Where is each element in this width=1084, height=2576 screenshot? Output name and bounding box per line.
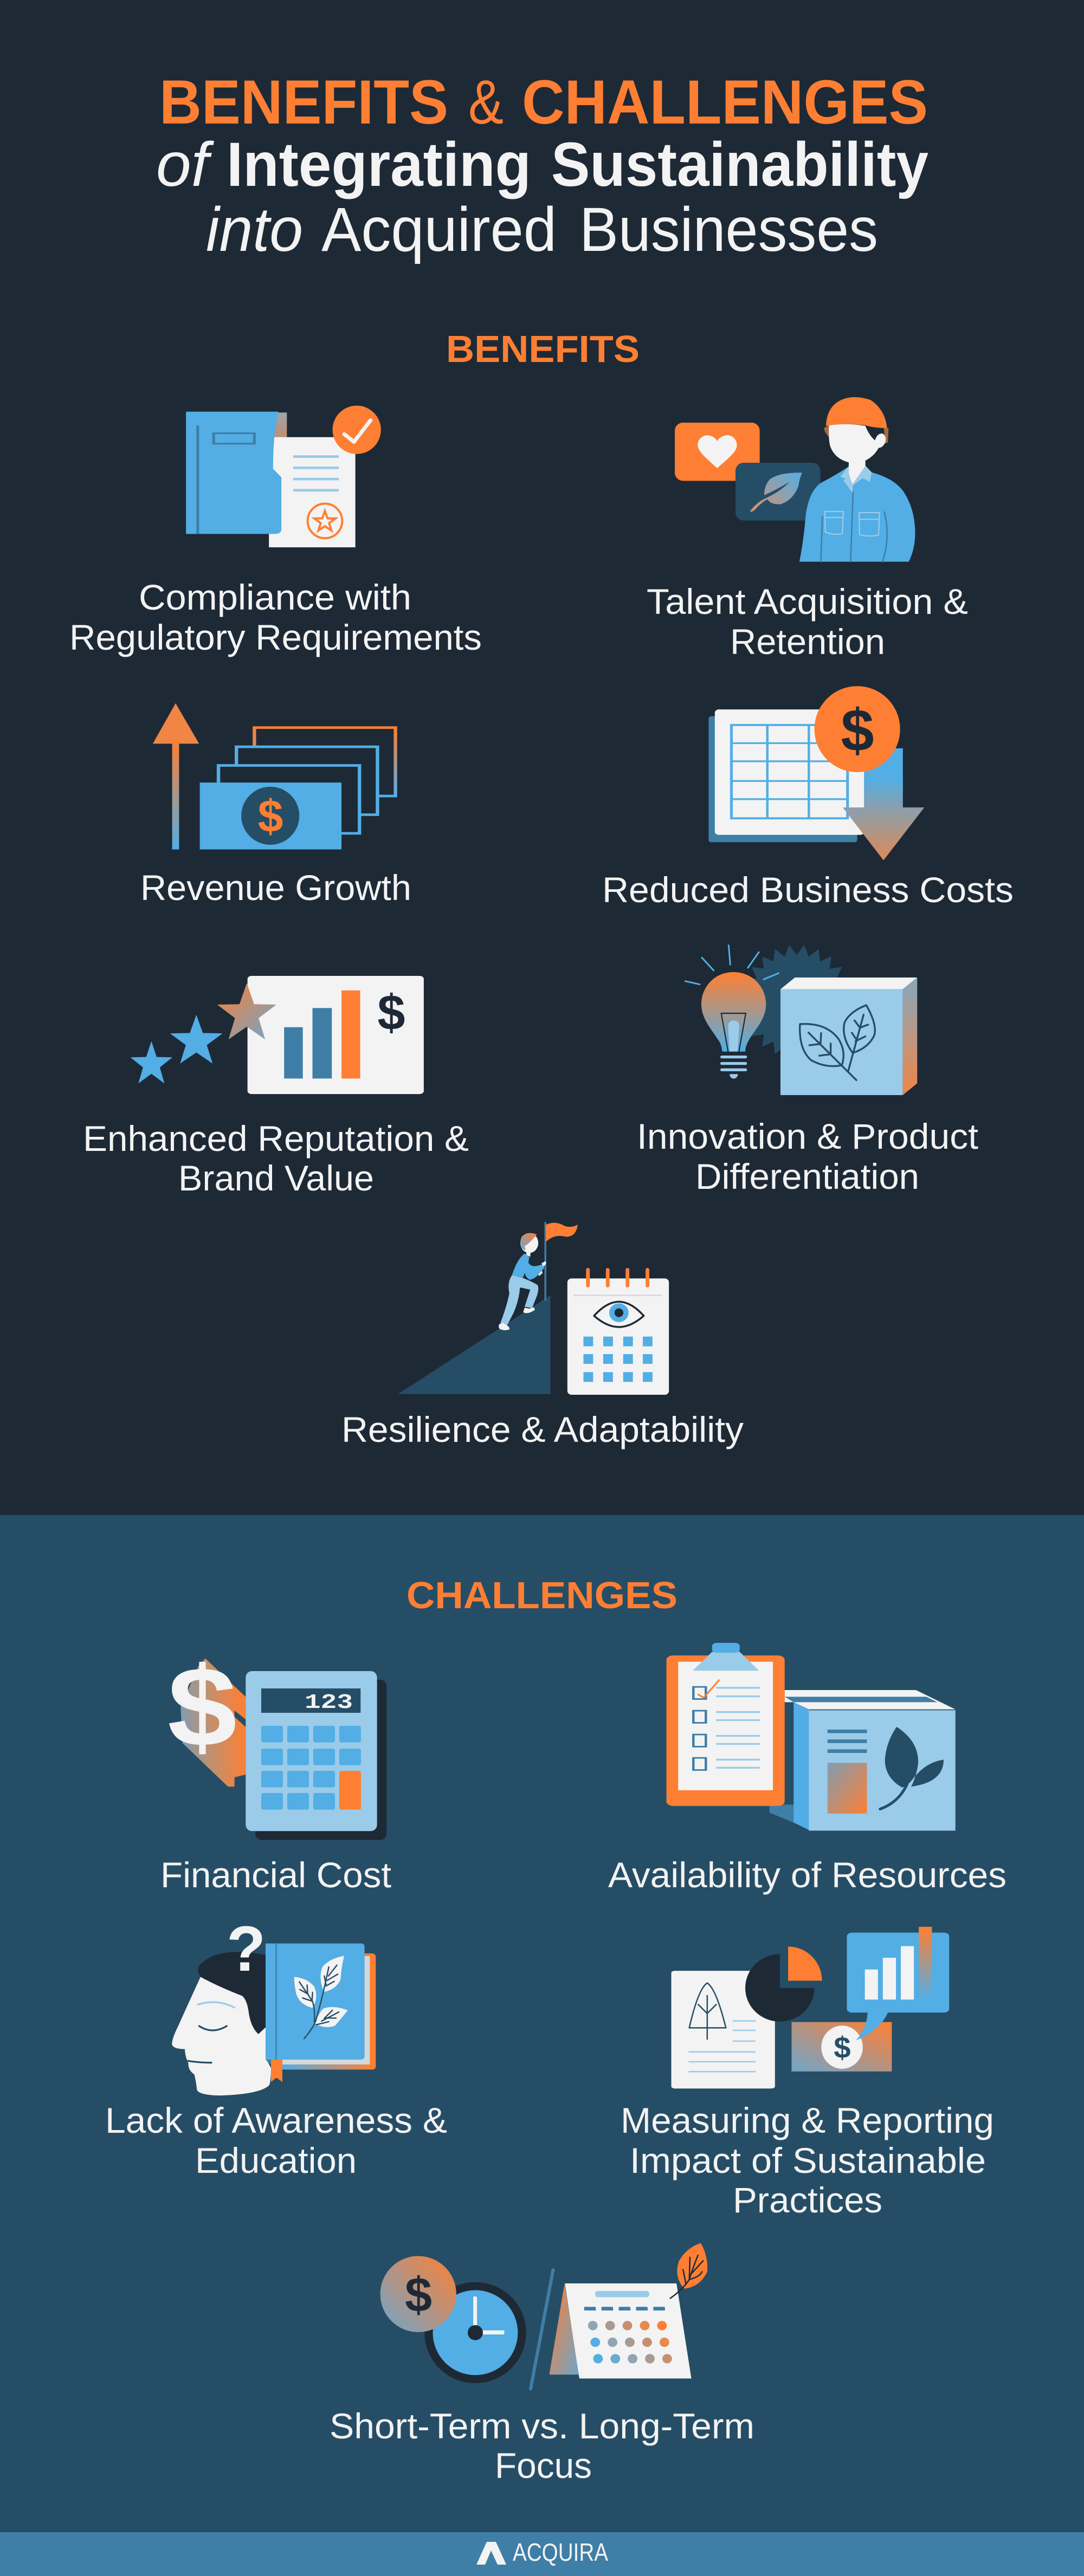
panel: benefits background and content	[0, 0, 1084, 1515]
title: Businesses	[579, 195, 878, 264]
label: reputation: Enhanced Reputation &	[83, 1118, 469, 1158]
logo mark	[476, 2542, 506, 2565]
title: Acquired	[321, 195, 557, 264]
label: compliance: Compliance with	[139, 577, 411, 617]
label: innovation: Innovation & Product	[637, 1116, 978, 1156]
icon: money stack with up arrow: $	[258, 791, 283, 842]
icon: clock versus calendar	[380, 2243, 707, 2389]
label: reputation: Brand Value	[178, 1158, 374, 1198]
icon: clock versus calendar: $	[405, 2268, 432, 2322]
icon: chart with rating stars: $	[377, 985, 405, 1040]
title	[156, 68, 928, 264]
label: measuring: Measuring & Reporting	[621, 2100, 994, 2140]
label: resilience: Resilience & Adaptability	[341, 1409, 744, 1449]
label: short vs long term: Short-Term vs. Long-Term	[330, 2406, 754, 2446]
icon: climber with flag and calendar	[398, 1222, 669, 1395]
label: short vs long term	[330, 2406, 754, 2486]
title: BENEFITS	[159, 68, 448, 137]
label: revenue growth: Revenue Growth	[140, 868, 411, 908]
title: into	[206, 195, 303, 264]
label: financial cost: Financial Cost	[160, 1855, 391, 1895]
label: compliance	[69, 577, 482, 657]
heading: benefits: BENEFITS	[446, 328, 640, 370]
label: talent: Retention	[730, 622, 885, 662]
icon: head with question mark and book: ?	[227, 1913, 266, 1985]
footer bar	[0, 2532, 1084, 2576]
icon: head with question mark and book	[172, 1913, 376, 2095]
label: lack of awareness: Lack of Awareness &	[105, 2100, 447, 2140]
icon: worker with heart and leaf cards	[675, 397, 915, 562]
label: measuring: Impact of Sustainable	[630, 2140, 986, 2180]
icon: light bulb, gear and leaf box	[685, 938, 917, 1095]
label: innovation: Differentiation	[695, 1156, 919, 1196]
label: short vs long term: Focus	[495, 2445, 592, 2486]
icon: clipboard and leaf boxes	[667, 1643, 956, 1830]
icon: spreadsheet with dollar coin and down arrow	[708, 686, 924, 860]
title: &	[468, 68, 504, 137]
label: lack of awareness: Education	[195, 2140, 357, 2180]
label: measuring: Practices	[733, 2180, 882, 2220]
title: Sustainability	[551, 130, 928, 199]
icon: folder and certificate	[186, 406, 381, 547]
label: innovation	[637, 1116, 978, 1196]
icon: report, pie chart, bar chart bubble: $	[834, 2030, 851, 2064]
icon: report, pie chart, bar chart bubble	[672, 1927, 949, 2088]
label: talent: Talent Acquisition &	[647, 581, 968, 622]
icon: money stack with up arrow	[153, 703, 396, 850]
title: CHALLENGES	[522, 68, 928, 137]
icon: chart with rating stars	[131, 976, 424, 1094]
icon: calculator with dollar	[167, 1644, 386, 1840]
label: reduced costs: Reduced Business Costs	[602, 870, 1014, 910]
icon: spreadsheet with dollar coin and down arrow: $	[841, 697, 874, 764]
brand name: ACQUIRA	[513, 2538, 608, 2566]
label: lack of awareness	[105, 2100, 447, 2180]
title: of	[156, 130, 214, 199]
icon: calculator with dollar: 123	[305, 1691, 353, 1714]
label: talent	[647, 581, 968, 662]
label: compliance: Regulatory Requirements	[69, 617, 482, 657]
panel: challenges background and content	[0, 1515, 1084, 2532]
title: Integrating	[227, 130, 531, 199]
icon: calculator with dollar: $	[167, 1644, 237, 1770]
label: availability: Availability of Resources	[608, 1855, 1006, 1895]
label: reputation	[83, 1118, 469, 1198]
label: measuring	[621, 2100, 994, 2220]
heading: challenges: CHALLENGES	[406, 1574, 678, 1616]
